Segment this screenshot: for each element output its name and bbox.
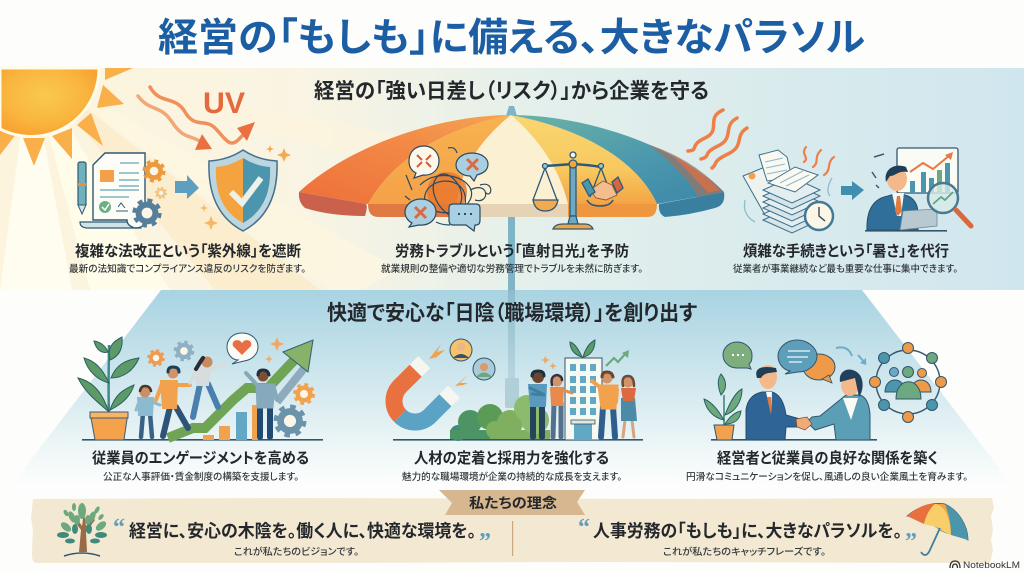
catchphrase quote: “ — [578, 515, 590, 541]
title: 経営の「もしも」に備える、大きなパラソル — [158, 17, 865, 60]
text: UV block: 複雑な法改正という「紫外線」を遮断 — [75, 242, 301, 260]
panel: sunny risk band — [0, 65, 1024, 290]
text: engagement block: 公正な人事評価・賃金制度の構築を支援します。 — [103, 471, 299, 483]
icon: heat waves — [688, 110, 747, 168]
text: engagement block: 従業員のエンゲージメントを高める — [92, 449, 309, 467]
icon: paper stack and clock — [743, 147, 834, 233]
catchphrase quote — [578, 515, 917, 558]
icon: sun — [0, 68, 133, 166]
ribbon: our philosophy: 私たちの理念 — [469, 495, 557, 511]
panel: shade trapezoid — [0, 290, 1024, 500]
icon: tree — [57, 503, 108, 556]
icon: tangled labour trouble — [405, 146, 491, 231]
text: heat block: 従業者が事業継続など最も重要な仕事に集中できます。 — [733, 263, 958, 275]
text: heat block: 煩雑な手続きという「暑さ」を代行 — [743, 242, 949, 260]
arrow: paperwork to business owner — [841, 181, 864, 200]
icon: talent magnet and building — [385, 339, 643, 441]
icon: shield — [200, 145, 291, 231]
icon: UV waves: UV — [203, 87, 245, 120]
text: relations block: 円滑なコミュニケーションを促し、風通しの良い企業風土を育みます。 — [686, 471, 968, 483]
text: UV block: 最新の法知識でコンプライアンス違反のリスクを防ぎます。 — [69, 263, 306, 275]
catchphrase quote: ” — [905, 529, 917, 555]
panel: philosophy banner — [31, 490, 994, 563]
catchphrase quote: 人事労務の「もしも」に、大きなパラソルを。 — [593, 521, 902, 541]
text: relations block — [686, 449, 968, 483]
icon: parasol canopy — [299, 115, 724, 217]
vision quote — [113, 515, 491, 558]
text: UV block — [69, 242, 306, 275]
logo: NotebookLM: NotebookLM — [963, 560, 1020, 571]
icon: balance scale and handshake — [533, 152, 623, 229]
icon: UV waves — [138, 87, 255, 150]
text: talent block: 魅力的な職場環境が企業の持続的な成長を支えます。 — [402, 471, 622, 483]
text: engagement block — [92, 449, 309, 483]
arrow: law to shield — [175, 175, 199, 199]
text: heat block — [733, 242, 958, 275]
icon: umbrella pole — [505, 106, 519, 408]
icon: engagement team climbing — [78, 333, 323, 441]
text: direct sun block — [381, 242, 643, 275]
icon: law documents and gears — [78, 153, 166, 228]
text: talent block — [402, 449, 622, 483]
icon: small parasol — [907, 503, 968, 555]
text: direct sun block: 労務トラブルという「直射日光」を予防 — [395, 242, 629, 260]
text: talent block: 人材の定着と採用力を強化する — [414, 449, 609, 467]
heading: shade section: 快適で安心な「日陰（職場環境）」を創り出す — [327, 302, 697, 325]
ribbon: our philosophy — [439, 490, 585, 515]
icon: business owner with chart — [865, 148, 971, 232]
vision quote: 経営に、安心の木陰を。働く人に、快適な環境を。 — [129, 521, 476, 541]
vision quote: ” — [479, 529, 491, 555]
vision quote: “ — [113, 515, 125, 541]
text: direct sun block: 就業規則の整備や適切な労務管理でトラブルを未然に防ぎます。 — [381, 263, 643, 275]
catchphrase quote: これが私たちのキャッチフレーズです。 — [663, 546, 826, 558]
heading: risk section: 経営の「強い日差し（リスク）」から企業を守る — [314, 80, 709, 103]
icon: handshake and network — [704, 340, 946, 441]
vision quote: これが私たちのビジョンです。 — [234, 546, 359, 558]
text: relations block: 経営者と従業員の良好な関係を築く — [717, 449, 938, 467]
